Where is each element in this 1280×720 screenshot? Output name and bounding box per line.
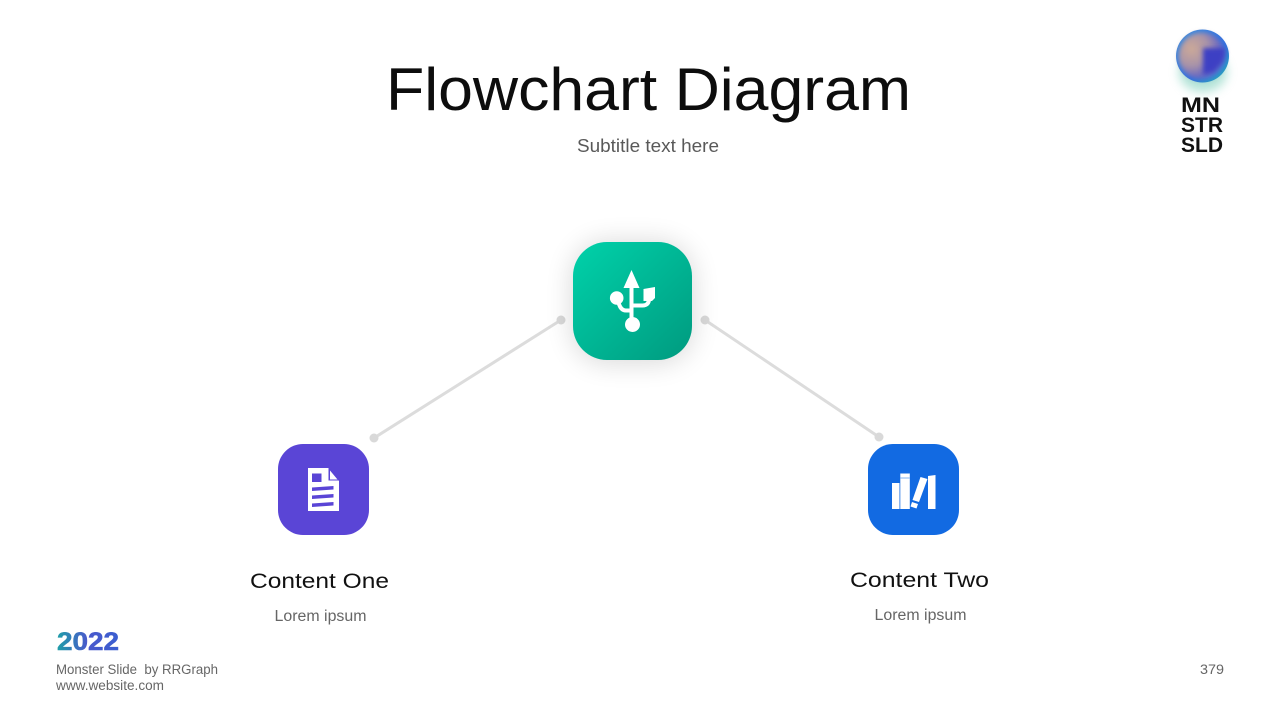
logo wordmark: MN xyxy=(1181,93,1220,117)
logo wordmark: STR xyxy=(1181,113,1223,137)
connector: right xyxy=(700,316,884,442)
logo sphere xyxy=(1176,30,1229,92)
subtitle: Subtitle text here xyxy=(577,135,719,156)
label: content two: Lorem ipsum xyxy=(874,607,966,624)
footer xyxy=(55,628,218,693)
label: content one: Lorem ipsum xyxy=(274,608,366,625)
icon: usb xyxy=(610,270,655,332)
node: content one xyxy=(278,444,369,535)
label: content one: Content One xyxy=(250,570,389,593)
footer website: www.website.com xyxy=(55,678,164,693)
label: content two: Content Two xyxy=(850,569,989,592)
logo wordmark: SLD xyxy=(1181,133,1223,157)
node: content two xyxy=(868,444,959,535)
connector: left xyxy=(370,316,566,442)
footer credit: Monster Slide by RRGraph xyxy=(56,662,218,677)
icon: document xyxy=(308,467,340,511)
central node xyxy=(573,242,692,362)
page number: 379 xyxy=(1200,661,1224,677)
title: Flowchart Diagram xyxy=(386,56,911,123)
footer year: 2022 xyxy=(57,628,119,656)
icon: books xyxy=(892,474,936,509)
label: content two xyxy=(850,569,989,624)
icon tile: blue xyxy=(868,444,959,535)
logo wordmark xyxy=(1181,93,1223,157)
logo xyxy=(1176,30,1229,157)
icon tile: purple xyxy=(278,444,369,535)
label: content one xyxy=(250,570,389,625)
